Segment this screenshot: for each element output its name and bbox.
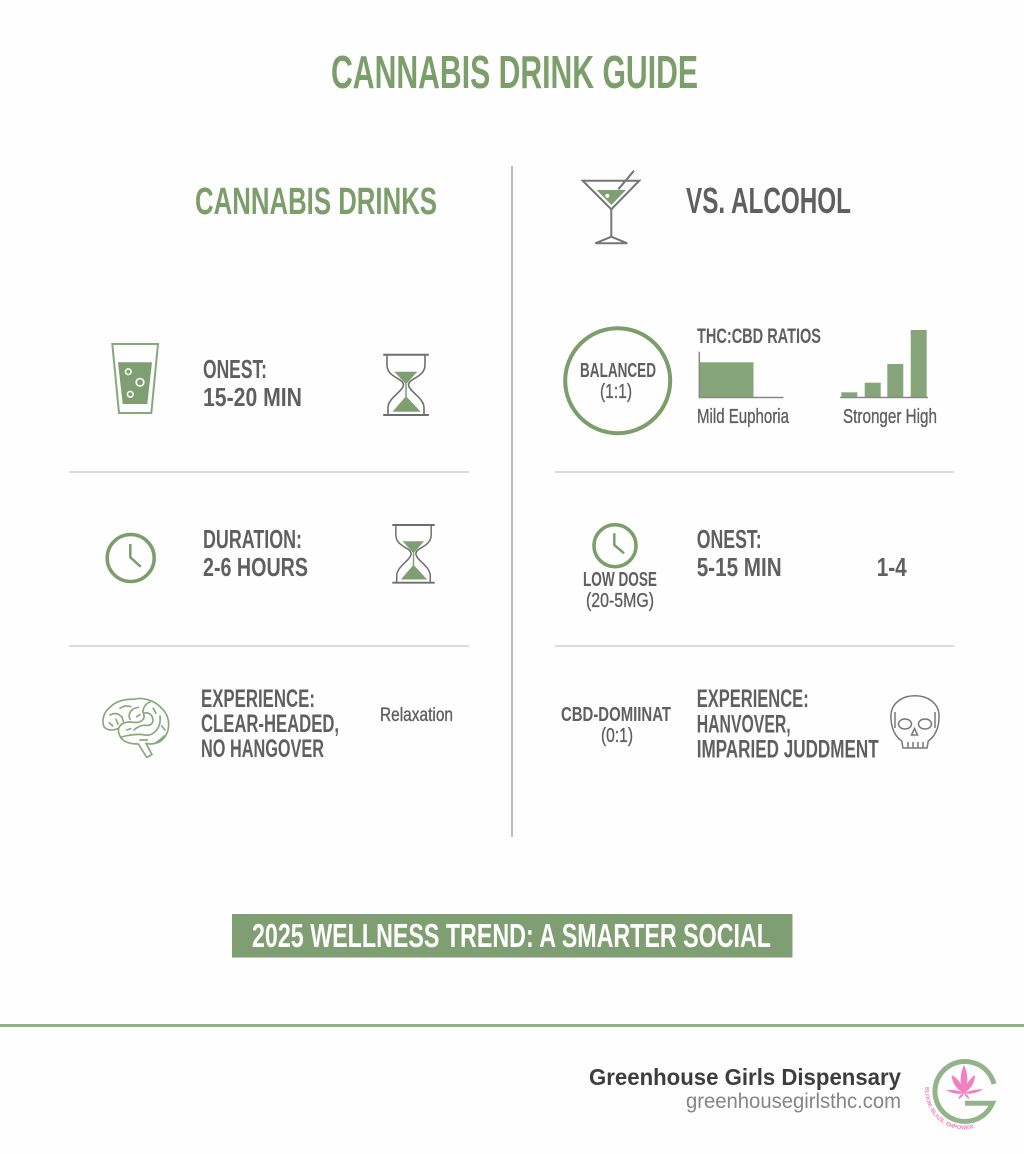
- chart: mild euphoria bar: Mild Euphoria: [697, 406, 790, 428]
- icon: brain: [103, 699, 169, 757]
- panel: alcohol onset row: [583, 524, 907, 612]
- badge: balanced 1:1: [565, 328, 670, 433]
- logo: greenhouse girls: [925, 1059, 996, 1130]
- badge: balanced 1:1: (1:1): [600, 381, 632, 403]
- text: experience hangover impaired judgment: HANVOVER,: [697, 710, 791, 738]
- text: onset 5-15 min: 5-15 MIN: [697, 552, 782, 582]
- text: experience clear-headed no hangover: NO HANGOVER: [201, 735, 324, 763]
- text: experience hangover impaired judgment: IMPARIED JUDDMENT: [697, 736, 879, 764]
- text: experience hangover impaired judgment: [697, 685, 879, 764]
- text: experience clear-headed no hangover: EXPERIENCE:: [201, 685, 315, 713]
- badge: balanced 1:1: BALANCED: [580, 360, 656, 382]
- icon: clock with low dose label: (20-5MG): [586, 590, 654, 612]
- chart: stronger high bars: Stronger High: [843, 406, 937, 428]
- panel: thc cbd ratios row: [565, 325, 937, 433]
- title: CANNABIS DRINK GUIDE: [331, 46, 698, 98]
- panel: cannabis drinks onset row: [112, 344, 429, 415]
- footer brand text: [589, 1064, 901, 1113]
- text: onset 15-20 min: 15-20 MIN: [203, 382, 302, 412]
- icon: hourglass: [383, 355, 429, 415]
- icon: martini glass: [583, 171, 639, 243]
- logo: greenhouse girls: BLOOM. BLAZE. EMPOWER.: [925, 1087, 975, 1130]
- text: experience hangover impaired judgment: EXPERIENCE:: [697, 685, 809, 713]
- text: experience clear-headed no hangover: [201, 685, 339, 763]
- label: cbd-dominant 0:1: CBD-DOMIINAT: [561, 704, 671, 726]
- label: relaxation: Relaxation: [380, 705, 453, 726]
- text: duration 2-6 hours: DURATION:: [203, 524, 302, 554]
- text: experience clear-headed no hangover: CLEAR-HEADED,: [201, 710, 339, 738]
- icon: skull: [891, 696, 939, 748]
- banner: wellness trend: [232, 914, 792, 958]
- icon: fizzy drink glass: [112, 344, 158, 413]
- chart: mild euphoria bar: [697, 352, 790, 428]
- footer brand text: Greenhouse Girls Dispensary: [589, 1064, 901, 1090]
- label: 1-4: 1-4: [877, 552, 907, 582]
- heading: vs. alcohol: VS. ALCOHOL: [686, 180, 851, 221]
- icon: hourglass: [392, 525, 435, 583]
- text: duration 2-6 hours: 2-6 HOURS: [203, 552, 308, 582]
- panel: alcohol experience row: [561, 685, 939, 764]
- heading: cannabis drinks: CANNABIS DRINKS: [195, 181, 437, 223]
- footer brand text: greenhousegirlsthc.com: [686, 1090, 901, 1113]
- panel: cannabis drinks experience row: [103, 685, 453, 763]
- text: onset 5-15 min: ONEST:: [697, 524, 762, 554]
- heading: thc:cbd ratios: THC:CBD RATIOS: [697, 325, 821, 348]
- label: cbd-dominant 0:1: [561, 704, 671, 747]
- text: onset 5-15 min: [697, 524, 782, 582]
- text: duration 2-6 hours: [203, 524, 308, 582]
- text: onset 15-20 min: [203, 354, 302, 412]
- banner: wellness trend: 2025 WELLNESS TREND: A SMARTER SOCIAL: [252, 917, 771, 954]
- icon: clock with low dose label: [583, 525, 657, 612]
- panel: cannabis drinks duration row: [107, 524, 435, 583]
- chart: stronger high bars: [840, 330, 937, 428]
- icon: clock with low dose label: LOW DOSE: [583, 569, 657, 591]
- text: onset 15-20 min: ONEST:: [203, 354, 267, 384]
- icon: clock: [107, 534, 154, 582]
- label: cbd-dominant 0:1: (0:1): [601, 725, 633, 747]
